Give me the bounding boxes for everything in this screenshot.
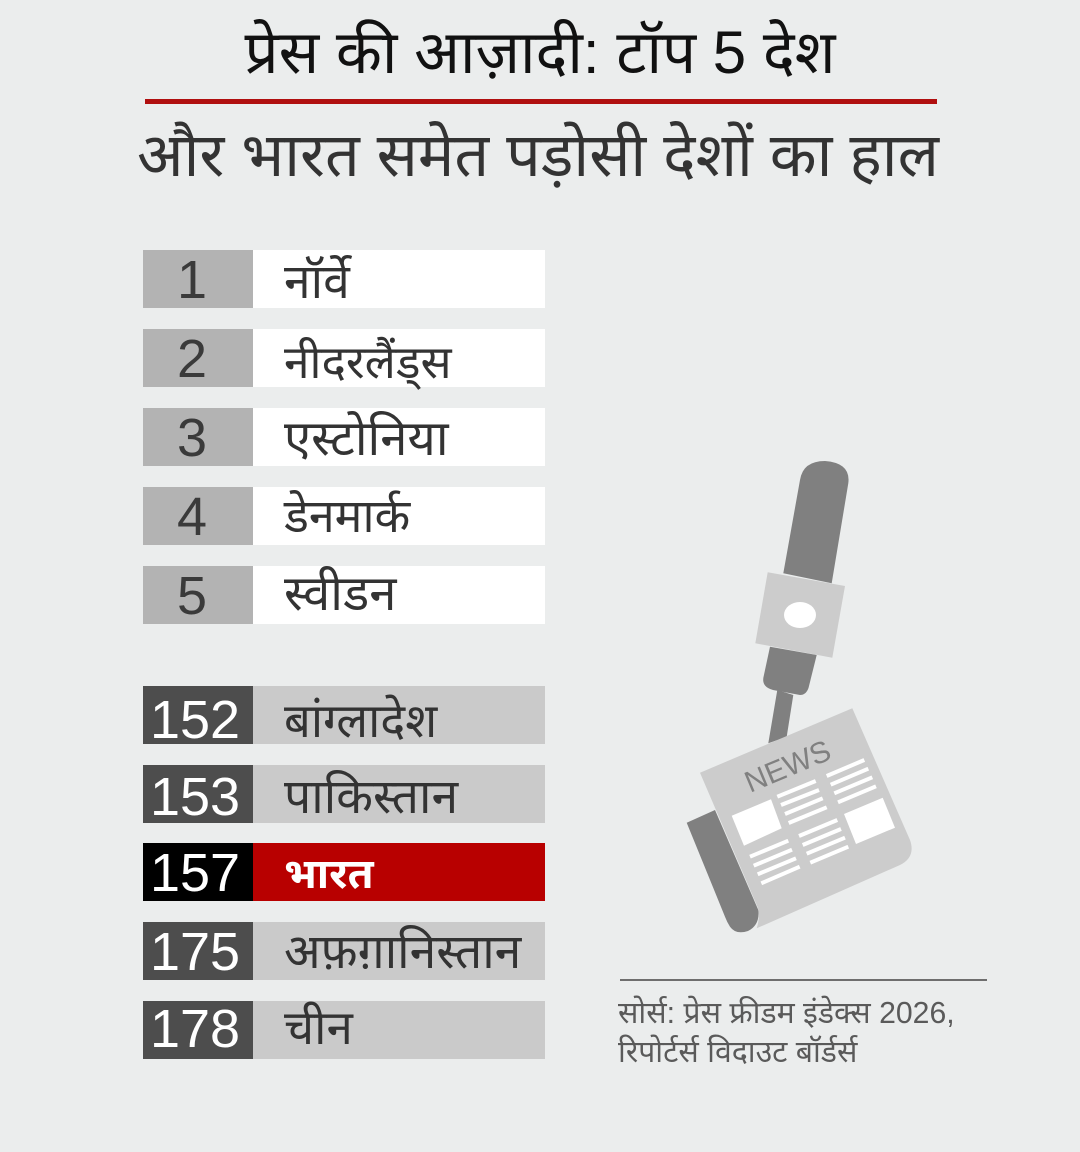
neighbour row: Pakistan bbox=[143, 765, 545, 827]
neighbour row: Bangladesh: 152 bbox=[150, 690, 240, 750]
highlighted row: India: 157 bbox=[150, 843, 240, 903]
top 5 row: Netherlands: 2 bbox=[177, 329, 207, 389]
top 5 row: Sweden bbox=[143, 566, 545, 626]
top 5 row: Denmark: 4 bbox=[177, 487, 207, 547]
source rule bbox=[620, 979, 987, 981]
icon: microphone bbox=[755, 461, 849, 743]
neighbour row: China: 178 bbox=[150, 999, 240, 1059]
neighbour row: Bangladesh bbox=[143, 686, 545, 750]
top 5 row: Estonia bbox=[143, 408, 545, 468]
source note: रिपोर्टर्स विदाउट बॉर्डर्स bbox=[618, 1036, 857, 1069]
title rule bbox=[145, 99, 937, 104]
highlighted row: India: भारत bbox=[284, 850, 374, 897]
top 5 row: Norway bbox=[143, 250, 545, 310]
top 5 row: Sweden: 5 bbox=[177, 566, 207, 626]
neighbour row: Afghanistan: अफ़ग़ानिस्तान bbox=[284, 926, 521, 979]
neighbour row: China: चीन bbox=[284, 1002, 353, 1055]
neighbour row: Bangladesh: बांग्लादेश bbox=[284, 694, 437, 747]
top 5 row: Norway: नॉर्वे bbox=[284, 256, 350, 309]
highlighted row: India bbox=[143, 843, 545, 903]
title: प्रेस की आज़ादी: टॉप 5 देश bbox=[244, 19, 836, 86]
source note bbox=[618, 996, 955, 1069]
subtitle: और भारत समेत पड़ोसी देशों का हाल bbox=[137, 121, 939, 189]
top 5 row: Norway: 1 bbox=[177, 250, 207, 310]
neighbour row: Afghanistan: 175 bbox=[150, 922, 240, 982]
neighbour row: Pakistan: 153 bbox=[150, 767, 240, 827]
top 5 row: Denmark: डेनमार्क bbox=[284, 490, 410, 542]
top 5 row: Netherlands bbox=[143, 329, 545, 390]
neighbour row: Pakistan: पाकिस्तान bbox=[284, 771, 458, 824]
top 5 row: Sweden: स्वीडन bbox=[284, 567, 396, 621]
top 5 row: Denmark bbox=[143, 487, 545, 547]
icon: newspaper: NEWS bbox=[740, 734, 836, 799]
icon: newspaper bbox=[687, 708, 912, 932]
source note: सोर्स: प्रेस फ्रीडम इंडेक्स 2026, bbox=[618, 997, 955, 1030]
neighbour row: China bbox=[143, 999, 545, 1059]
top 5 row: Netherlands: नीदरलैंड्स bbox=[284, 336, 452, 388]
top 5 row: Estonia: एस्टोनिया bbox=[284, 412, 449, 466]
neighbour row: Afghanistan bbox=[143, 922, 545, 982]
top 5 row: Estonia: 3 bbox=[177, 408, 207, 468]
